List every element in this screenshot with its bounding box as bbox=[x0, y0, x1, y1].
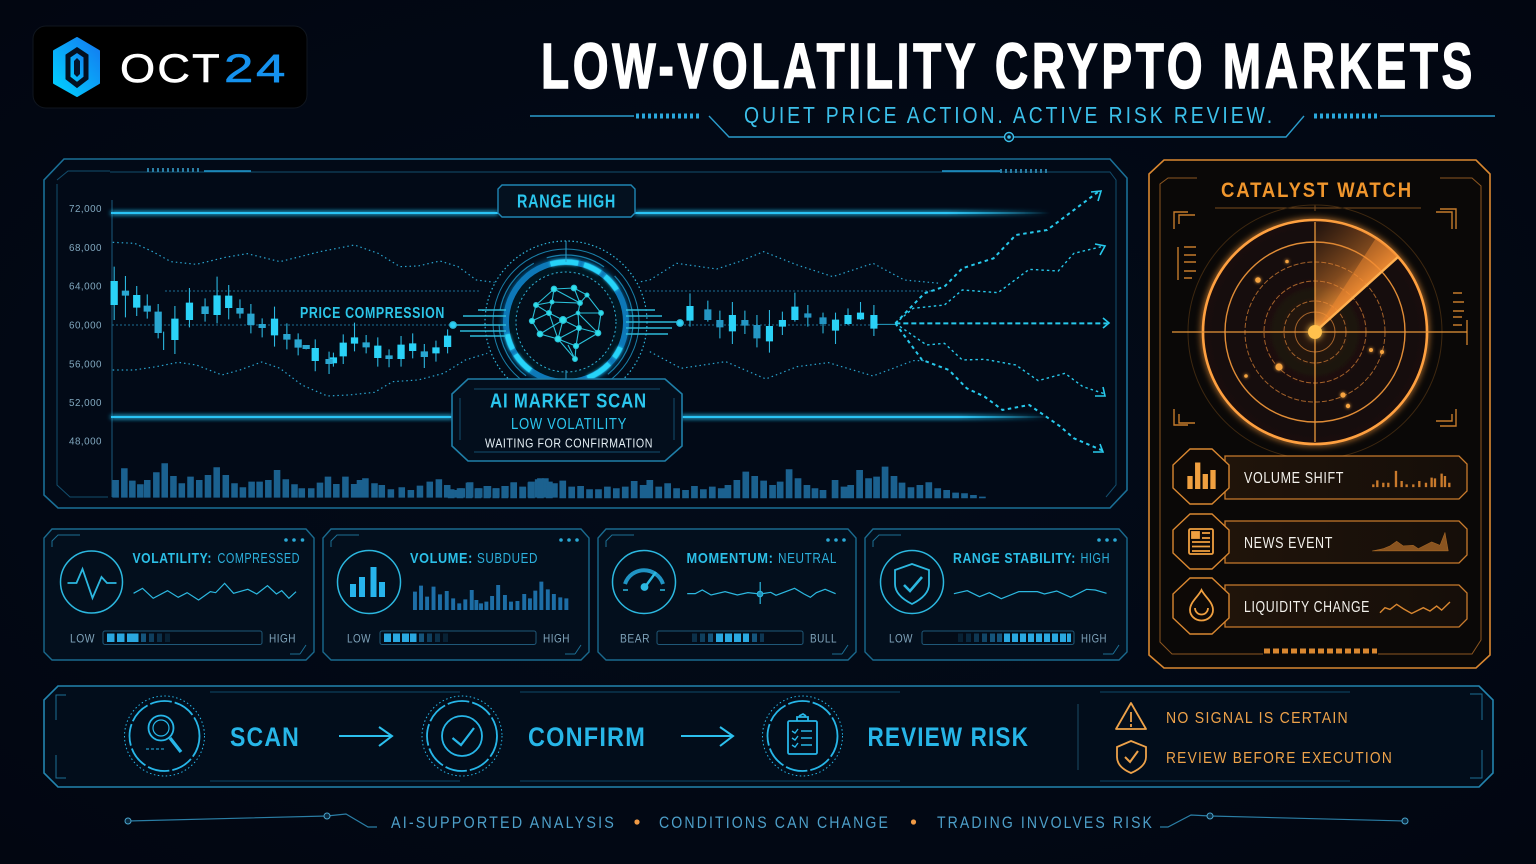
icon: clipboard bbox=[762, 696, 842, 776]
footer separator bbox=[634, 819, 640, 825]
row: liquidity change bbox=[1173, 578, 1467, 634]
volatility value: COMPRESSED bbox=[218, 550, 300, 567]
review risk label: REVIEW RISK bbox=[868, 722, 1029, 752]
icon: warning triangle bbox=[1116, 703, 1146, 729]
catalyst heading: CATALYST WATCH bbox=[1221, 179, 1413, 202]
subtitle with decorative rule bbox=[530, 102, 1495, 142]
subtitle text: QUIET PRICE ACTION. ACTIVE RISK REVIEW. bbox=[744, 102, 1275, 128]
news event sparkline bbox=[1372, 532, 1448, 551]
arrow: confirm to review bbox=[681, 727, 733, 746]
panel: momentum card bbox=[598, 529, 856, 660]
radar blips bbox=[1244, 260, 1384, 408]
y axis labels: 52,000 bbox=[69, 397, 102, 409]
footer separator bbox=[911, 819, 916, 825]
step: scan bbox=[124, 696, 300, 776]
momentum marker bbox=[757, 591, 763, 597]
radar sweep bbox=[1315, 220, 1398, 332]
volume gauge bbox=[347, 631, 570, 646]
volatility sparkline bbox=[134, 583, 296, 600]
volatility gauge: LOW bbox=[70, 632, 95, 646]
logo badge bbox=[33, 26, 307, 108]
icon: bars bbox=[338, 550, 400, 614]
volume gauge: HIGH bbox=[543, 632, 570, 646]
panel: volume card bbox=[323, 529, 589, 660]
momentum value: NEUTRAL bbox=[778, 550, 837, 567]
momentum heading: MOMENTUM: bbox=[686, 550, 774, 567]
range low line bbox=[111, 416, 1050, 418]
icon: neural network brain bbox=[529, 285, 603, 361]
volume heading: VOLUME: bbox=[410, 550, 473, 567]
panel: price chart bbox=[44, 159, 1127, 508]
radar bbox=[1172, 205, 1467, 459]
icon: confirm check bbox=[422, 696, 502, 776]
forecast paths bbox=[895, 192, 1107, 451]
volatility heading: VOLATILITY: bbox=[132, 550, 212, 567]
icon: pulse bbox=[60, 551, 122, 613]
volume sparkbars bbox=[415, 582, 566, 610]
logo wordmark: OCT bbox=[120, 47, 222, 91]
volume shift sparkline bbox=[1373, 471, 1449, 487]
reference dotted levels bbox=[112, 291, 935, 325]
AI scan node bbox=[450, 241, 683, 403]
candlesticks right bbox=[690, 293, 895, 353]
range stability sparkline bbox=[954, 589, 1107, 599]
range stability gauge bbox=[889, 631, 1107, 646]
momentum gauge: BULL bbox=[810, 632, 837, 646]
footer text one: AI-SUPPORTED ANALYSIS bbox=[391, 813, 616, 832]
panel: process bar bbox=[44, 686, 1493, 787]
y axis labels: 60,000 bbox=[69, 320, 102, 332]
range stability gauge: LOW bbox=[889, 632, 913, 646]
volume value: SUBDUED bbox=[477, 550, 538, 567]
AI market scan box bbox=[452, 379, 682, 461]
volume shift label: VOLUME SHIFT bbox=[1244, 470, 1344, 487]
range stability heading: RANGE STABILITY: bbox=[953, 550, 1076, 567]
y axis labels: 56,000 bbox=[69, 358, 102, 370]
circuit lines left bbox=[450, 310, 506, 336]
icon: scan magnifier bbox=[124, 696, 204, 776]
news event label: NEWS EVENT bbox=[1244, 535, 1333, 552]
y axis labels bbox=[69, 203, 102, 448]
icon: newspaper bbox=[1189, 529, 1213, 554]
icon: caution shield bbox=[1117, 741, 1146, 773]
row: news event bbox=[1173, 514, 1467, 569]
range stability value: HIGH bbox=[1080, 550, 1110, 567]
confirm label: CONFIRM bbox=[528, 722, 646, 752]
panel: catalyst watch bbox=[1149, 160, 1490, 668]
step: review risk bbox=[762, 696, 1029, 776]
logo wordmark bbox=[120, 47, 288, 91]
AI market scan box: AI MARKET SCAN bbox=[490, 390, 647, 412]
caution text two: REVIEW BEFORE EXECUTION bbox=[1166, 750, 1393, 767]
arrow: scan to confirm bbox=[339, 727, 392, 746]
scan label: SCAN bbox=[230, 722, 300, 752]
y axis labels: 64,000 bbox=[69, 280, 102, 292]
icon: gauge bbox=[612, 550, 676, 614]
y axis labels: 72,000 bbox=[69, 203, 102, 215]
momentum gauge: BEAR bbox=[620, 632, 650, 646]
circuit lines right bbox=[626, 310, 683, 334]
radar brackets bbox=[1174, 209, 1467, 426]
candlesticks left bbox=[114, 267, 448, 374]
AI market scan box: LOW VOLATILITY bbox=[511, 416, 627, 433]
range stability gauge: HIGH bbox=[1081, 632, 1107, 646]
row: volume shift bbox=[1173, 449, 1467, 504]
volatility envelope left bbox=[113, 242, 494, 396]
liquidity change label: LIQUIDITY CHANGE bbox=[1244, 599, 1370, 616]
caution text one: NO SIGNAL IS CERTAIN bbox=[1166, 710, 1349, 727]
volatility gauge bbox=[70, 631, 296, 646]
liquidity change sparkline bbox=[1380, 602, 1450, 613]
range high label: RANGE HIGH bbox=[517, 192, 616, 212]
volume gauge: LOW bbox=[347, 632, 371, 646]
icon: bar chart bbox=[1190, 462, 1213, 489]
volatility envelope right bbox=[641, 252, 940, 379]
price compression label: PRICE COMPRESSION bbox=[300, 305, 445, 322]
icon: hexagon logo mark bbox=[54, 38, 99, 96]
panel: range stability card bbox=[865, 529, 1127, 660]
footer text three: TRADING INVOLVES RISK bbox=[937, 813, 1154, 832]
y axis labels: 48,000 bbox=[69, 436, 102, 448]
volume bars bbox=[116, 463, 982, 498]
volatility gauge: HIGH bbox=[269, 632, 296, 646]
icon: liquidity drop bbox=[1190, 590, 1213, 620]
footer disclaimer bbox=[125, 813, 1408, 832]
logo wordmark: 24 bbox=[224, 47, 288, 91]
range high line bbox=[111, 212, 1050, 214]
y axis labels: 68,000 bbox=[69, 242, 102, 254]
momentum sparkline bbox=[687, 582, 836, 604]
panel: volatility card bbox=[44, 529, 314, 660]
AI market scan box: WAITING FOR CONFIRMATION bbox=[485, 436, 653, 450]
step: confirm bbox=[422, 696, 646, 776]
footer text two: CONDITIONS CAN CHANGE bbox=[659, 813, 890, 832]
arrow heads bbox=[1091, 191, 1109, 452]
range high label bbox=[498, 185, 635, 217]
icon: shield check bbox=[880, 550, 944, 614]
momentum gauge bbox=[620, 631, 837, 646]
